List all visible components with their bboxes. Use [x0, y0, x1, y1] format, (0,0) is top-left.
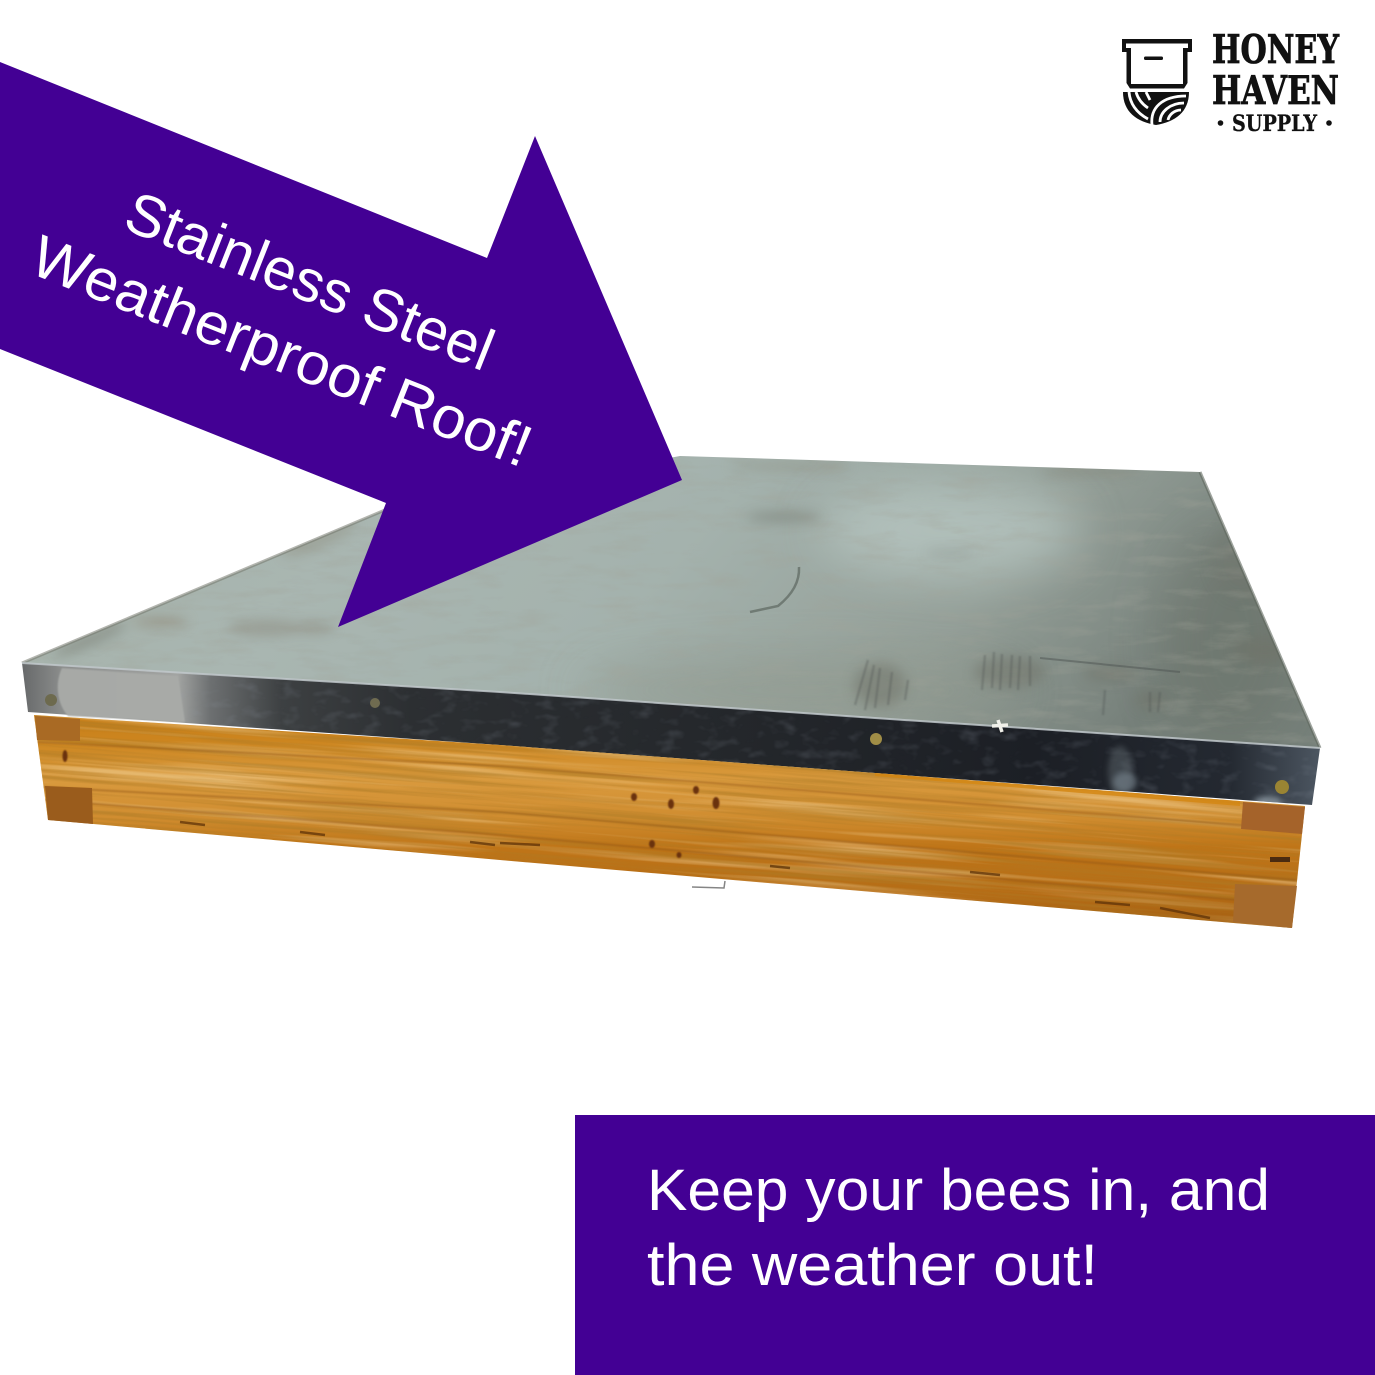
roof metal top surface — [0, 450, 1340, 760]
arrow shape — [0, 62, 682, 627]
wood side — [34, 715, 1305, 928]
callout arrow pointing at roof — [0, 62, 682, 627]
logo wordmark — [1212, 27, 1340, 137]
wood corner joints — [35, 716, 1305, 928]
tagline text: Keep your bees in, and — [647, 1158, 1270, 1223]
logo wordmark: SUPPLY — [1232, 111, 1317, 137]
arrow text: Weatherproof Roof! — [22, 223, 541, 480]
surface stains — [54, 460, 1156, 708]
photo: hive roof — [22, 456, 1322, 928]
wood knots and dark marks — [62, 750, 720, 858]
rivets — [45, 694, 1289, 794]
tagline text — [647, 1158, 1270, 1298]
icon: hive shield — [1122, 39, 1192, 125]
roof metal front band — [22, 660, 1320, 810]
scratches — [750, 567, 799, 612]
panel: tagline — [575, 1115, 1375, 1375]
arrow text: Stainless Steel — [116, 179, 503, 384]
tagline text: the weather out! — [647, 1233, 1098, 1298]
logo: Honey Haven Supply — [1122, 27, 1340, 137]
logo wordmark: HAVEN — [1212, 68, 1339, 114]
logo wordmark: HONEY — [1212, 27, 1340, 73]
